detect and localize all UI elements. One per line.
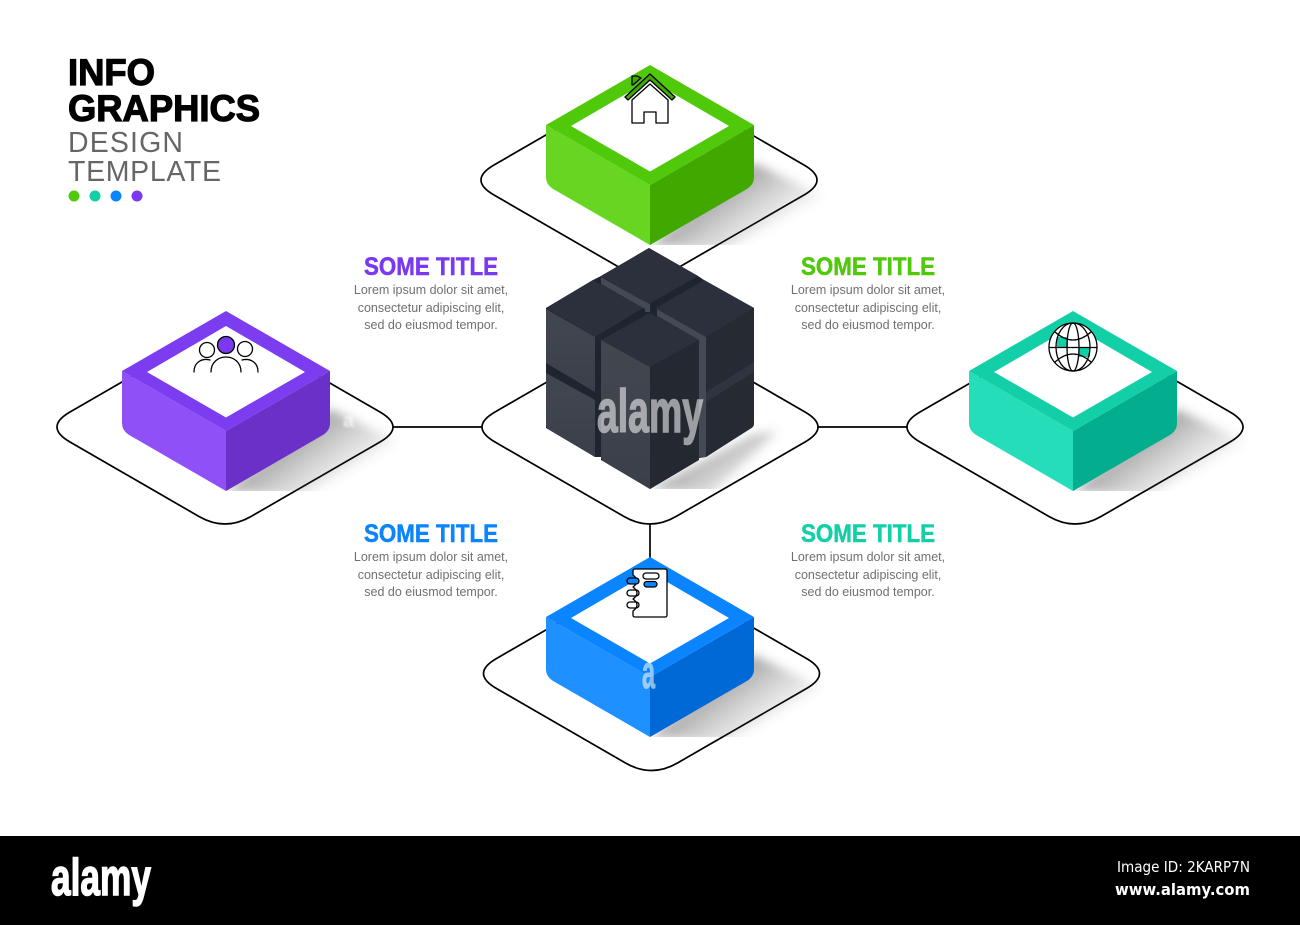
blue box (546, 557, 822, 743)
front cube (601, 313, 699, 489)
title block (68, 52, 260, 202)
heading: SOME TITLE (801, 520, 935, 548)
watermark: alamy center: alamy (597, 378, 703, 445)
title: INFO GRAPHICS: INFO (68, 52, 155, 93)
subtitle: DESIGN TEMPLATE (68, 127, 221, 188)
body: consectetur adipiscing elit, (795, 568, 941, 582)
heading: SOME TITLE (364, 253, 498, 281)
website: www.alamy.com (1115, 880, 1250, 899)
green box (546, 65, 822, 251)
platform: bottom (484, 576, 820, 770)
teal box (969, 311, 1245, 497)
text block: purple (354, 253, 508, 332)
footer logo: alamy (51, 849, 151, 907)
body: sed do eiusmod tempor. (801, 318, 935, 332)
purple box (122, 311, 398, 497)
icon: notebook (627, 569, 667, 617)
platform: center (482, 330, 818, 524)
cube shadow (650, 431, 778, 495)
image id: Image ID: 2KARP7N (1117, 858, 1250, 876)
text block: green (791, 253, 945, 332)
icon: house (625, 74, 675, 123)
icon: people (194, 336, 258, 372)
body: consectetur adipiscing elit, (795, 301, 941, 315)
back cube top (601, 248, 698, 304)
watermark: faint a on shadow: a (343, 410, 355, 432)
body: consectetur adipiscing elit, (358, 568, 504, 582)
body: Lorem ipsum dolor sit amet, (791, 283, 945, 297)
subtitle: DESIGN TEMPLATE: TEMPLATE (68, 156, 221, 188)
center cube (546, 248, 778, 495)
body: consectetur adipiscing elit, (358, 301, 504, 315)
subtitle: DESIGN TEMPLATE: DESIGN (68, 127, 183, 159)
body: sed do eiusmod tempor. (801, 585, 935, 599)
heading: SOME TITLE (801, 253, 935, 281)
title: INFO GRAPHICS: GRAPHICS (68, 88, 260, 129)
icon: globe (1049, 323, 1097, 371)
body: Lorem ipsum dolor sit amet, (791, 550, 945, 564)
footer bar (0, 836, 1300, 925)
platform: left (57, 330, 393, 524)
connector lines (390, 427, 910, 560)
text block: blue (354, 520, 508, 599)
body: Lorem ipsum dolor sit amet, (354, 283, 508, 297)
heading: SOME TITLE (364, 520, 498, 548)
back seam highlights (601, 276, 650, 312)
body: Lorem ipsum dolor sit amet, (354, 550, 508, 564)
cube silhouette (546, 248, 754, 489)
body: sed do eiusmod tempor. (364, 585, 498, 599)
title: INFO GRAPHICS (68, 52, 260, 129)
body: sed do eiusmod tempor. (364, 318, 498, 332)
platform: right (907, 330, 1243, 524)
text block: teal (791, 520, 945, 599)
colour dots (68, 190, 142, 202)
left cube (546, 280, 643, 457)
platform: top (481, 83, 817, 277)
right cube (656, 280, 754, 457)
watermark: small a: a (642, 646, 655, 698)
